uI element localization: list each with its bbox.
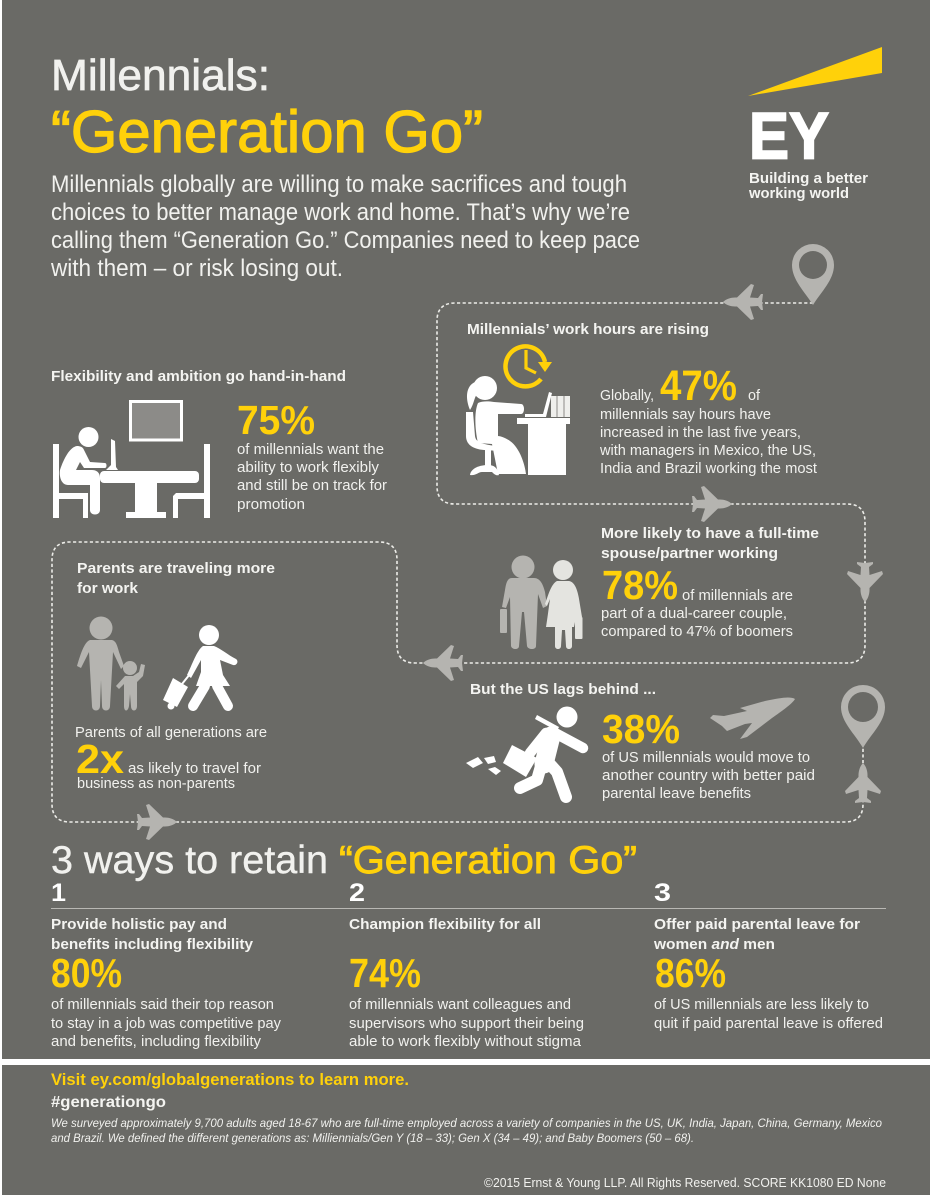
column 3 bbox=[653, 879, 883, 1032]
icon: plane bottom right bbox=[845, 763, 881, 803]
body text: promotion bbox=[237, 496, 305, 513]
survey note: We surveyed approximately 9,700 adults aged 18-67 who are full-time employed across a variety of companies in the US, UK, India, Japan, China, Germany, Mexico bbox=[51, 1116, 882, 1130]
body text: with managers in Mexico, the US, bbox=[599, 442, 816, 459]
body text: increased in the last five years, bbox=[600, 424, 801, 441]
body text bbox=[349, 996, 584, 1050]
body text: of millennials want colleagues and bbox=[349, 996, 571, 1013]
stat 75%: 75% bbox=[237, 397, 315, 443]
EY logo bbox=[748, 47, 882, 202]
stat 2x: 2x bbox=[76, 736, 124, 782]
body text: millennials say hours have bbox=[600, 406, 771, 423]
title bbox=[51, 51, 483, 165]
footer hashtag: #generationgo bbox=[51, 1094, 166, 1111]
icon: map pin top bbox=[792, 244, 834, 305]
logo letters: EY bbox=[749, 98, 829, 172]
stat 86%: 86% bbox=[655, 950, 726, 996]
panel: work hours bbox=[466, 321, 818, 477]
logo tagline: working world bbox=[748, 185, 849, 202]
intro paragraph: Millennials globally are willing to make sacrifices and tough bbox=[51, 171, 627, 198]
icon: running businessman bbox=[466, 706, 583, 797]
number: 1 bbox=[51, 879, 66, 907]
heading: 3 ways to retain: 3 ways to retain bbox=[51, 839, 328, 882]
body text: of US millennials would move to bbox=[602, 749, 810, 766]
heading: 3 ways to retain bbox=[51, 839, 637, 882]
heading: 3 ways to retain: “Generation Go” bbox=[339, 839, 637, 882]
body text: compared to 47% of boomers bbox=[601, 623, 793, 640]
icon: plane bottom bbox=[137, 804, 177, 840]
heading: Millennials’ work hours are rising bbox=[467, 321, 709, 338]
divider rule bbox=[51, 908, 886, 909]
survey note: and Brazil. We defined the different generations as: Milliennials/Gen Y (18 – 33); Gen X (34 – 49); and Baby Boomers (50 – 68). bbox=[51, 1131, 694, 1145]
intro paragraph: calling them “Generation Go.” Companies need to keep pace bbox=[51, 227, 640, 254]
body text: to stay in a job was competitive pay bbox=[51, 1015, 281, 1032]
body text bbox=[51, 996, 281, 1050]
column 2 bbox=[349, 879, 584, 1050]
body text: Globally, bbox=[600, 387, 654, 404]
heading bbox=[51, 916, 254, 953]
body text: Parents of all generations are bbox=[75, 724, 267, 741]
number: 3 bbox=[654, 879, 671, 907]
body text: India and Brazil working the most bbox=[600, 460, 818, 477]
heading: Offer paid parental leave for bbox=[654, 916, 860, 933]
panel: dual career bbox=[500, 525, 819, 649]
logo tagline bbox=[748, 170, 868, 202]
stat 78%: 78% bbox=[602, 562, 678, 608]
body text: able to work flexibly without stigma bbox=[349, 1033, 582, 1050]
body text: part of a dual-career couple, bbox=[601, 605, 787, 622]
heading: Parents are traveling more bbox=[77, 560, 275, 577]
logo tagline: Building a better bbox=[749, 170, 868, 187]
stat 80%: 80% bbox=[51, 950, 122, 996]
body text: ability to work flexibly bbox=[237, 459, 379, 476]
body text: of bbox=[748, 387, 761, 404]
body text: and benefits, including flexibility bbox=[51, 1033, 261, 1050]
icon: plane right side bbox=[847, 562, 883, 602]
icon: parent and child bbox=[77, 616, 145, 710]
body text: and still be on track for bbox=[237, 477, 387, 494]
heading: for work bbox=[77, 580, 139, 597]
title: Millennials: bbox=[51, 51, 270, 100]
icon: person at table bbox=[53, 402, 210, 518]
body text: of millennials want the bbox=[237, 441, 384, 458]
body text bbox=[654, 996, 883, 1032]
body text: of millennials are bbox=[682, 587, 793, 604]
stat 38%: 38% bbox=[602, 706, 680, 752]
dashed journey route bbox=[52, 303, 865, 822]
survey note bbox=[51, 1116, 882, 1145]
heading: Flexibility and ambition go hand-in-hand bbox=[51, 368, 346, 385]
number: 2 bbox=[349, 879, 365, 907]
title: “Generation Go” bbox=[51, 99, 483, 165]
icon: plane top bbox=[723, 284, 763, 320]
heading bbox=[601, 525, 819, 562]
icon: plane middle bbox=[692, 486, 732, 522]
copyright: ©2015 Ernst & Young LLP. All Rights Reserved. SCORE KK1080 ED None bbox=[484, 1175, 886, 1190]
body text bbox=[237, 441, 387, 513]
icon: woman with suitcase bbox=[163, 625, 237, 710]
heading: benefits including flexibility bbox=[51, 936, 254, 953]
heading: More likely to have a full-time bbox=[601, 525, 819, 542]
intro paragraph bbox=[50, 171, 640, 282]
heading: spouse/partner working bbox=[601, 545, 778, 562]
body text bbox=[602, 749, 815, 802]
body text bbox=[75, 724, 267, 792]
stat 74%: 74% bbox=[349, 950, 421, 996]
heading: Champion flexibility for all bbox=[349, 916, 541, 933]
intro paragraph: with them – or risk losing out. bbox=[50, 255, 343, 282]
body text: of millennials said their top reason bbox=[51, 996, 274, 1013]
heading bbox=[653, 916, 860, 953]
panel: parents traveling bbox=[75, 560, 275, 792]
body text: business as non-parents bbox=[77, 775, 235, 792]
heading: Provide holistic pay and bbox=[51, 916, 227, 933]
footer background panel bbox=[2, 1065, 930, 1195]
icon: map pin lower bbox=[841, 685, 885, 748]
heading: women and men bbox=[653, 936, 775, 953]
footer call to action: Visit ey.com/globalgenerations to learn more. bbox=[51, 1071, 409, 1089]
column 1 bbox=[51, 879, 281, 1050]
intro paragraph: choices to better manage work and home. That’s why we’re bbox=[51, 199, 630, 226]
icon: clock bbox=[505, 346, 552, 386]
icon: woman at desk bbox=[466, 376, 570, 475]
body text: as likely to travel for bbox=[128, 760, 261, 777]
icon: plane center left bbox=[423, 645, 463, 681]
heading: But the US lags behind ... bbox=[470, 681, 656, 698]
body text: another country with better paid bbox=[602, 767, 815, 784]
heading bbox=[77, 560, 275, 597]
panel: US lags bbox=[466, 681, 815, 802]
body text bbox=[601, 587, 793, 640]
body text: quit if paid parental leave is offered bbox=[654, 1015, 883, 1032]
body text: supervisors who support their being bbox=[349, 1015, 584, 1032]
body text bbox=[599, 362, 818, 477]
logo beam bbox=[748, 47, 882, 96]
panel: flexibility bbox=[51, 368, 387, 518]
icon: large tilted plane bbox=[710, 698, 795, 739]
body text: parental leave benefits bbox=[602, 785, 751, 802]
stat 47%: 47% bbox=[660, 362, 737, 410]
body text: of US millennials are less likely to bbox=[654, 996, 869, 1013]
icon: couple bbox=[500, 556, 582, 649]
